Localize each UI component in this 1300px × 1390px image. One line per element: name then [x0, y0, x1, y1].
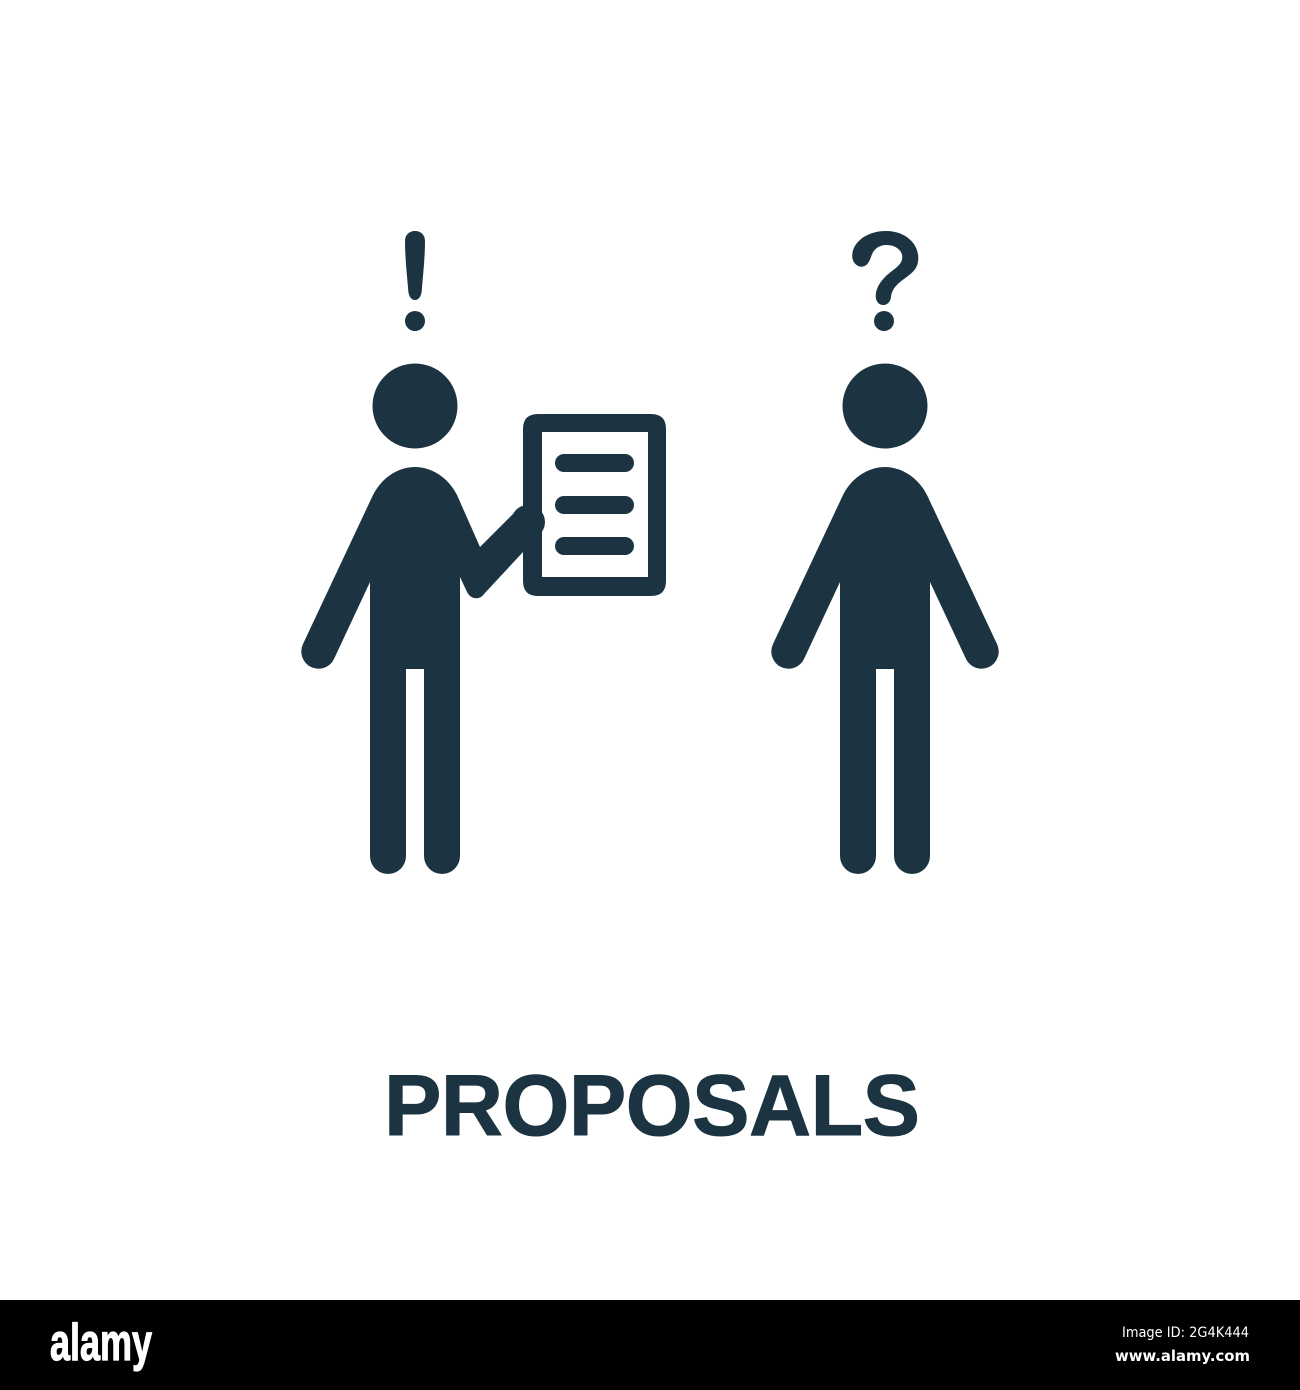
head: presenter	[372, 364, 458, 448]
image id: Image ID: 2G4K444	[1122, 1325, 1249, 1341]
body: presenter	[301, 467, 541, 874]
head: listener	[842, 364, 928, 448]
icon: person presenting proposal with exclamation mark	[301, 231, 666, 874]
body: listener	[771, 467, 999, 874]
website: www.alamy.com	[1115, 1347, 1250, 1365]
icon: question mark	[852, 231, 918, 331]
document: proposal sheet	[511, 414, 666, 596]
icon: exclamation mark	[405, 231, 425, 331]
title: PROPOSALS	[384, 1058, 920, 1154]
footer band	[0, 1300, 1300, 1390]
watermark logo: alamy	[50, 1314, 152, 1372]
icon: confused person with question mark	[771, 231, 999, 874]
